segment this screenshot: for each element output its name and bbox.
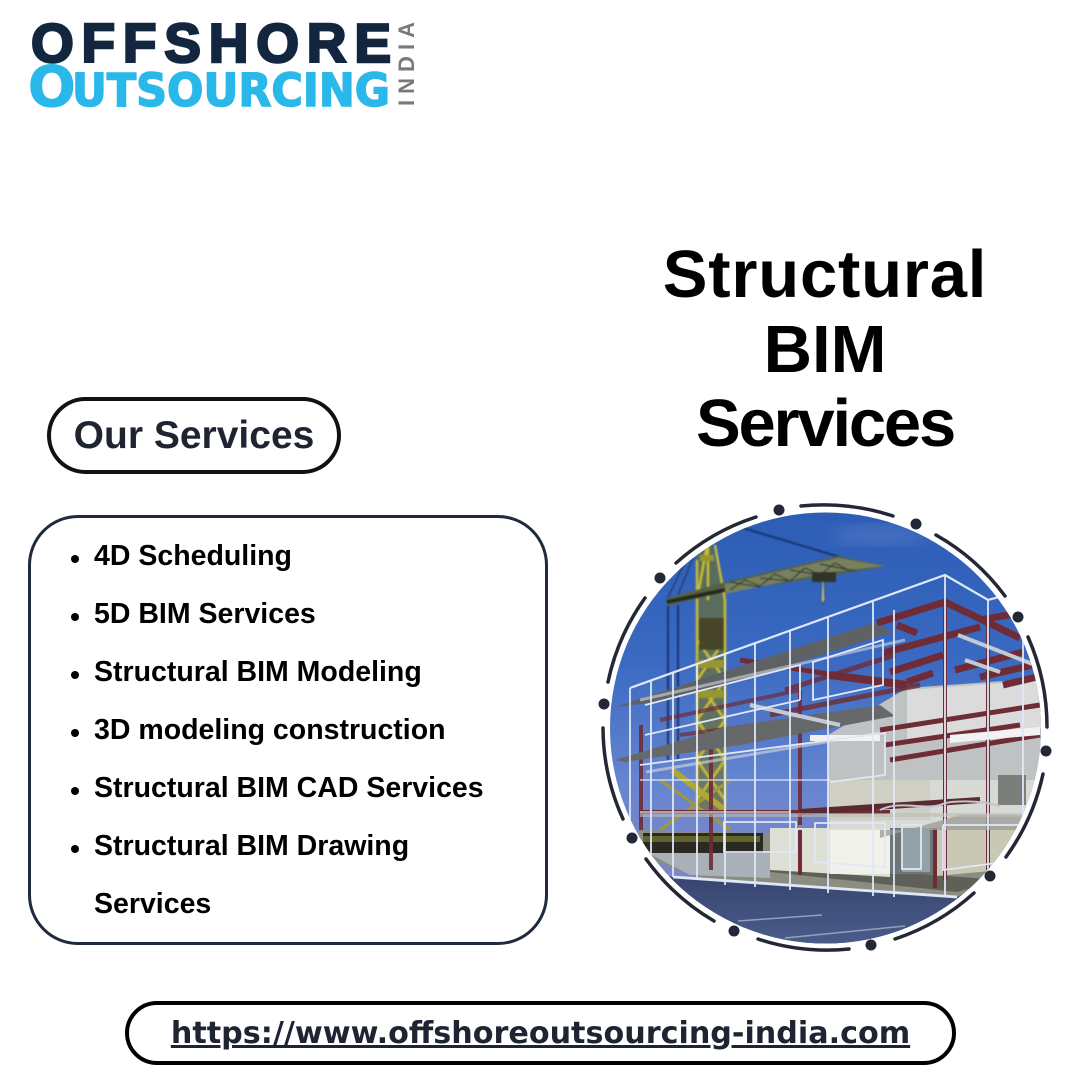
website link pill bbox=[125, 1001, 956, 1065]
ground floor pad bbox=[630, 830, 1040, 897]
website link pill: https://www.offshoreoutsourcing-india.com bbox=[171, 1016, 910, 1051]
photo: steel building under construction with crane bbox=[598, 503, 1052, 952]
decorative ring: arcs bbox=[603, 505, 1047, 950]
list: services: 5D BIM Services bbox=[94, 598, 316, 630]
list: services: 3D modeling construction bbox=[94, 714, 446, 746]
list: services: 4D Scheduling bbox=[94, 540, 292, 572]
title: Structural bbox=[663, 237, 987, 312]
logo word: OUTSOURCING bbox=[28, 55, 390, 120]
heading pill: Our Services bbox=[47, 397, 341, 474]
list: services bbox=[71, 540, 484, 920]
list: services: Structural BIM Drawing bbox=[94, 830, 409, 862]
sky bbox=[600, 505, 1050, 950]
title: BIM bbox=[764, 312, 886, 387]
red steel beams bbox=[640, 602, 1040, 888]
list: services: Services bbox=[94, 888, 211, 920]
ground floor walls bbox=[770, 828, 890, 877]
crane bbox=[667, 528, 887, 810]
white wireframe bbox=[630, 575, 1045, 897]
road bbox=[672, 880, 978, 944]
logo word: OUTSOURCING: O bbox=[28, 55, 76, 120]
logo word: INDIA: INDIA bbox=[394, 22, 419, 106]
panel: services list bbox=[28, 515, 548, 945]
list: services: Structural BIM CAD Services bbox=[94, 772, 484, 804]
logo bbox=[28, 12, 419, 120]
logo word: OFFSHORE: OFFSHORE bbox=[31, 12, 391, 74]
title bbox=[663, 237, 987, 461]
title: Services bbox=[696, 386, 954, 461]
decorative ring: dots bbox=[598, 504, 1052, 950]
upper floor interiors bbox=[828, 678, 1045, 830]
heading pill: Our Services: Our Services bbox=[74, 414, 314, 457]
list: services: Structural BIM Modeling bbox=[94, 656, 422, 688]
logo word: OUTSOURCING: UTSOURCING bbox=[72, 64, 390, 117]
floor slabs bbox=[615, 623, 893, 707]
